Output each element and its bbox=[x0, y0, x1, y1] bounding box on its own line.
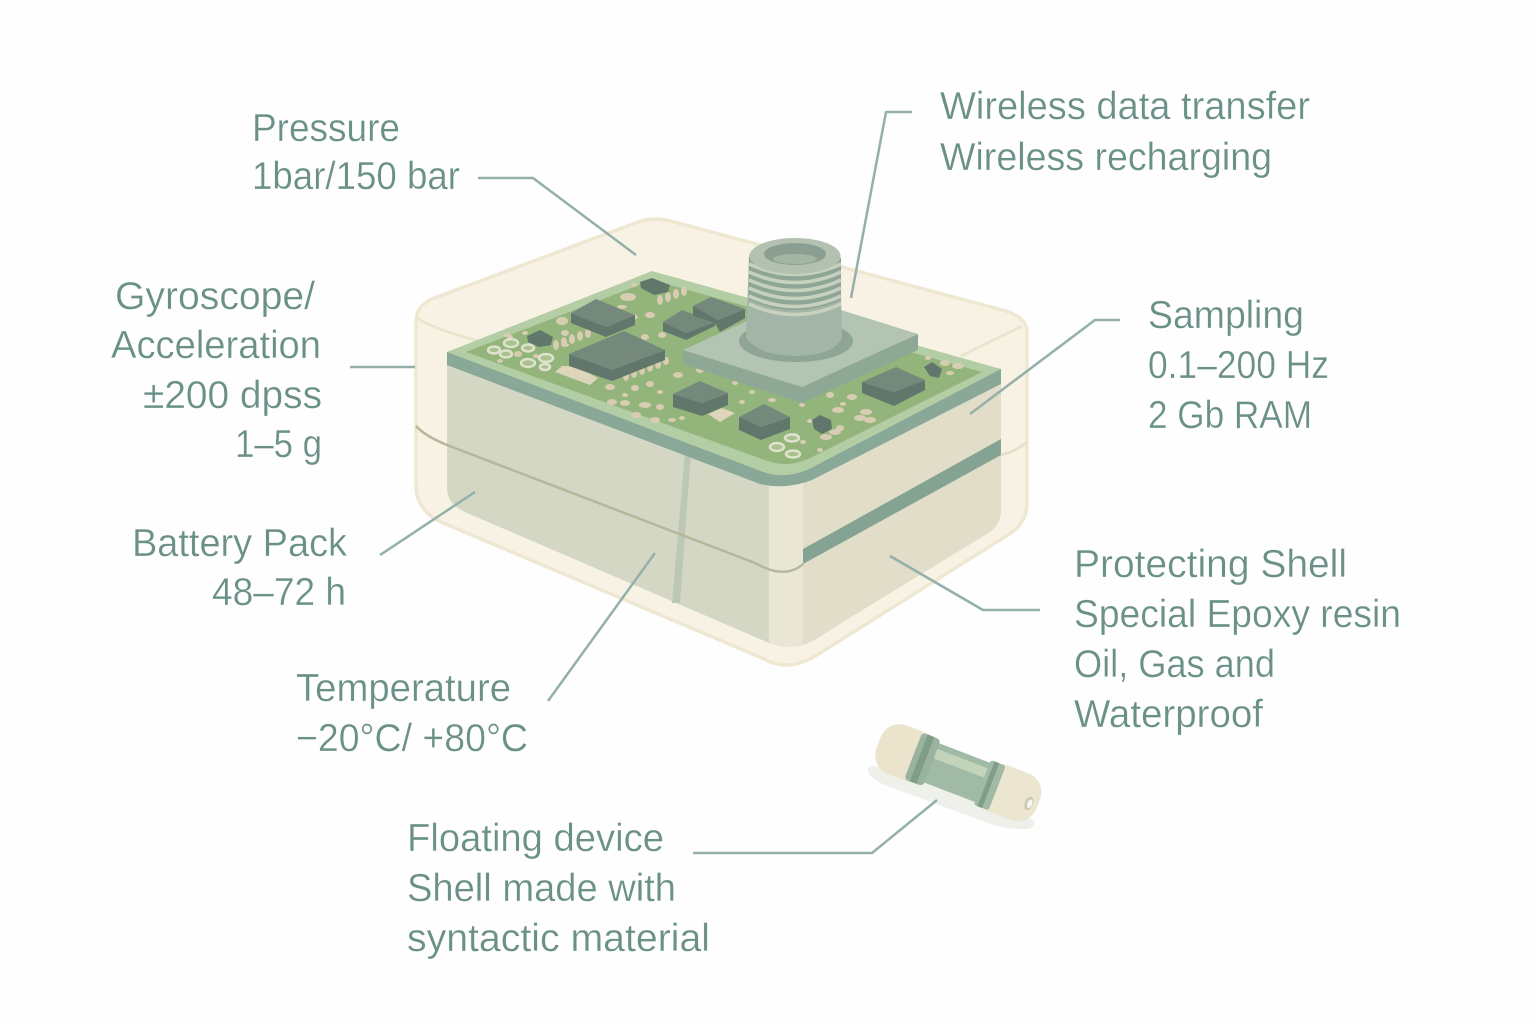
device: sensor enclosure bbox=[416, 219, 1027, 665]
capsule body bbox=[915, 740, 997, 805]
label: pressure: Pressure bbox=[252, 107, 400, 150]
label: floating device: syntactic material bbox=[407, 917, 710, 960]
label: sampling: 2 Gb RAM bbox=[1148, 394, 1312, 437]
label: floating device: Shell made with bbox=[407, 867, 676, 910]
label: gyroscope and acceleration bbox=[111, 275, 322, 466]
capsule bands bbox=[904, 732, 941, 786]
label: floating device bbox=[407, 817, 710, 960]
small tan resistor blocks bbox=[555, 366, 735, 422]
inner block corner strip bbox=[769, 475, 803, 647]
label: gyroscope and acceleration: ±200 dpss bbox=[143, 374, 322, 417]
vertical strip on left face bbox=[672, 452, 691, 603]
inner block right face bbox=[803, 380, 1001, 645]
label: sampling: 0.1–200 Hz bbox=[1148, 344, 1329, 387]
board rim bbox=[447, 271, 1001, 475]
label: gyroscope and acceleration: 1–5 g bbox=[235, 423, 322, 466]
threaded connector post bbox=[739, 238, 853, 362]
label: protecting shell: Protecting Shell bbox=[1074, 543, 1347, 586]
label: wireless bbox=[940, 85, 1310, 179]
shell mid seam bbox=[416, 426, 803, 572]
label: protecting shell: Special Epoxy resin bbox=[1074, 593, 1401, 636]
label: temperature bbox=[296, 667, 528, 760]
ring pads bbox=[488, 339, 800, 458]
label: floating device: Floating device bbox=[407, 817, 664, 860]
label: battery pack: 48–72 h bbox=[212, 571, 346, 614]
capsule end hole bbox=[1023, 795, 1035, 811]
floating device capsule bbox=[868, 718, 1048, 829]
label: protecting shell bbox=[1074, 543, 1401, 736]
capsule shadow bbox=[868, 766, 1035, 829]
board edge bbox=[447, 352, 1001, 486]
label: gyroscope and acceleration: Gyroscope/ bbox=[115, 275, 315, 318]
circuit board bbox=[447, 238, 1001, 486]
label: temperature: −20°C/ +80°C bbox=[296, 717, 528, 760]
solder pads bbox=[497, 283, 964, 452]
label: sampling bbox=[1148, 294, 1329, 437]
base square block bbox=[683, 297, 918, 403]
label: temperature: Temperature bbox=[296, 667, 511, 710]
label: gyroscope and acceleration: Acceleration bbox=[111, 324, 321, 367]
label: protecting shell: Oil, Gas and bbox=[1074, 643, 1275, 686]
dark band on right face bbox=[803, 439, 1001, 564]
label: sampling: Sampling bbox=[1148, 294, 1304, 337]
label: pressure: 1bar/150 bar bbox=[252, 155, 460, 198]
capsule left cap bbox=[869, 718, 946, 789]
label: wireless: Wireless data transfer bbox=[940, 85, 1310, 128]
inner block left face bbox=[447, 360, 769, 643]
label: wireless: Wireless recharging bbox=[940, 136, 1272, 179]
label: battery pack: Battery Pack bbox=[132, 522, 347, 565]
shell back seam bbox=[416, 317, 1022, 356]
label: battery pack bbox=[132, 522, 347, 614]
capsule right cap bbox=[971, 758, 1047, 827]
leader lines bbox=[350, 112, 1120, 853]
board surface bbox=[466, 280, 982, 464]
label: protecting shell: Waterproof bbox=[1074, 693, 1263, 736]
chips bbox=[527, 278, 942, 440]
protective resin shell bbox=[416, 219, 1027, 665]
label: pressure bbox=[252, 107, 460, 198]
